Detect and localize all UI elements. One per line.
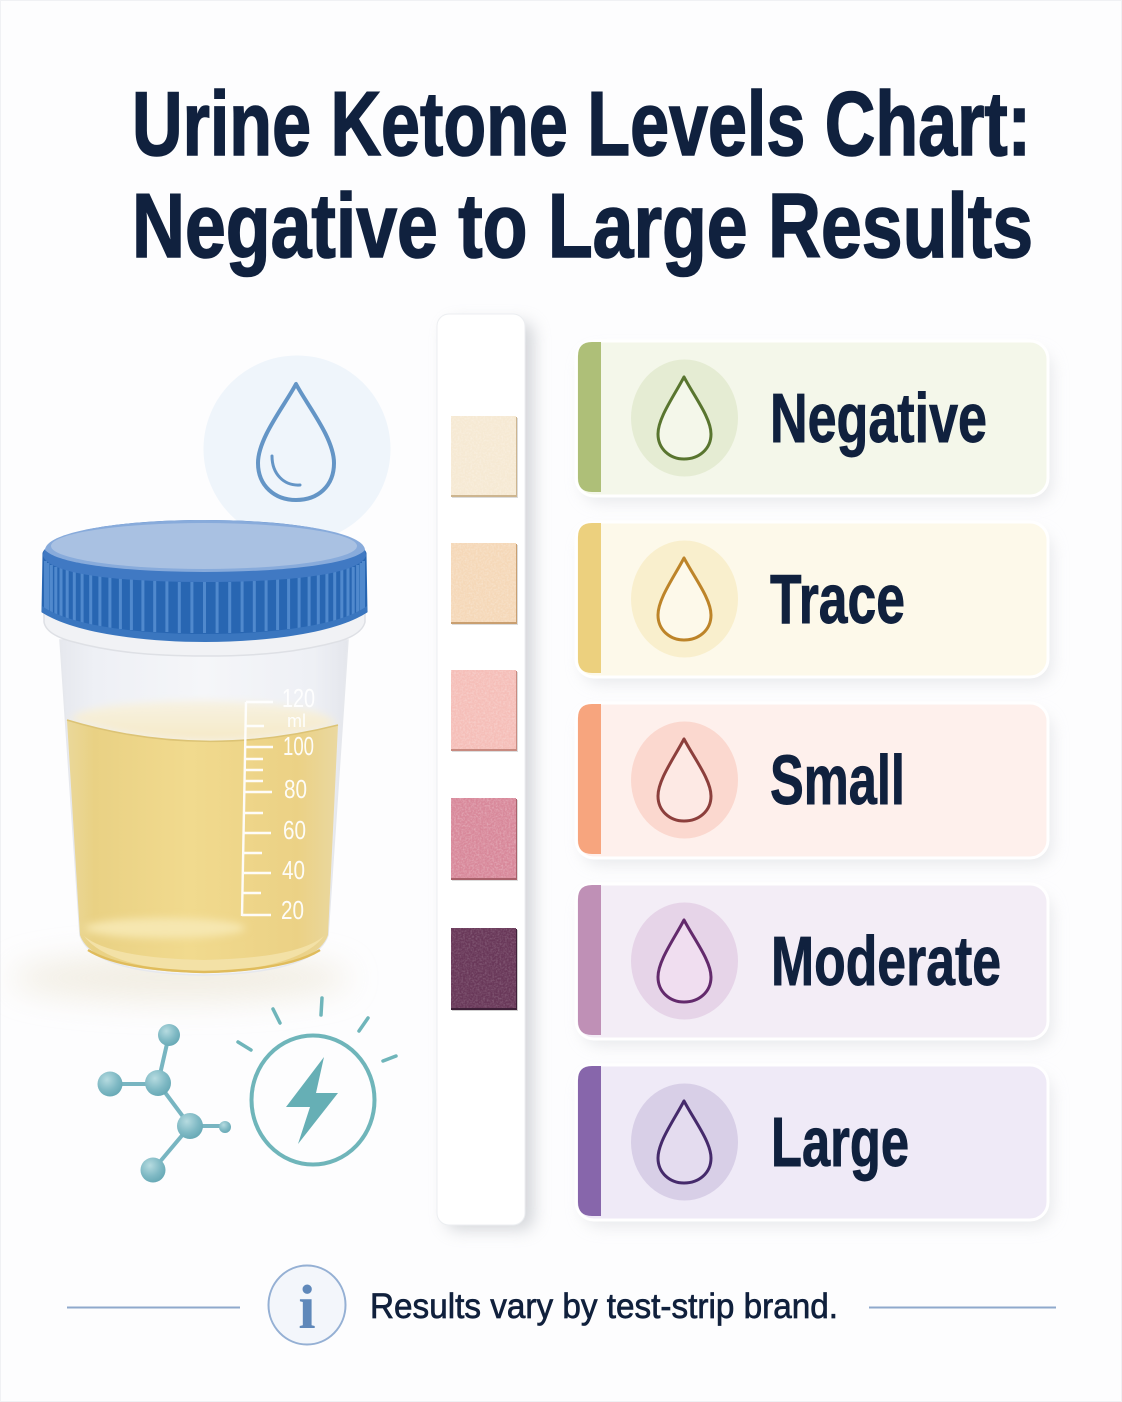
measurement scale: 20: [281, 895, 304, 925]
cup ground shadow: [10, 956, 350, 1000]
measurement scale: 40: [282, 855, 305, 885]
footer note: Results vary by test-strip brand.: [370, 1287, 838, 1326]
measurement scale: 120: [282, 683, 315, 713]
card: moderate: Moderate: [771, 922, 1001, 1000]
card: large: [576, 1065, 1052, 1226]
pad: small: [451, 670, 518, 752]
measurement scale: 80: [284, 774, 307, 804]
title: [132, 74, 1033, 277]
blue lid: [42, 520, 367, 642]
pad: moderate: [451, 798, 518, 881]
measurement scale: [242, 683, 315, 925]
icon: molecule: [98, 1024, 231, 1182]
test strip: [437, 314, 534, 1230]
cup body: [60, 640, 348, 975]
footer note: [67, 1266, 1056, 1344]
cup rim: [44, 600, 365, 656]
card: trace: [576, 522, 1052, 683]
pad: trace: [451, 543, 518, 625]
pad: negative: [451, 416, 518, 498]
specimen cup illustration: [10, 520, 367, 1000]
card: moderate: [576, 884, 1052, 1045]
card: negative: Negative: [770, 379, 987, 457]
measurement scale: 60: [283, 815, 306, 845]
card: trace: Trace: [770, 560, 905, 638]
icon: info: i: [298, 1274, 316, 1342]
measurement scale: 100: [283, 731, 314, 761]
card: large: Large: [771, 1103, 909, 1181]
icon: info: [268, 1266, 346, 1344]
measurement scale: ml: [287, 711, 306, 731]
urine liquid: [67, 701, 338, 973]
icon: water drop in pale circle: [204, 356, 390, 542]
card: small: Small: [770, 741, 905, 819]
card: negative: [576, 341, 1052, 502]
icon: energy bolt: [238, 998, 396, 1164]
pad: large: [451, 928, 518, 1011]
card: small: [576, 703, 1052, 864]
